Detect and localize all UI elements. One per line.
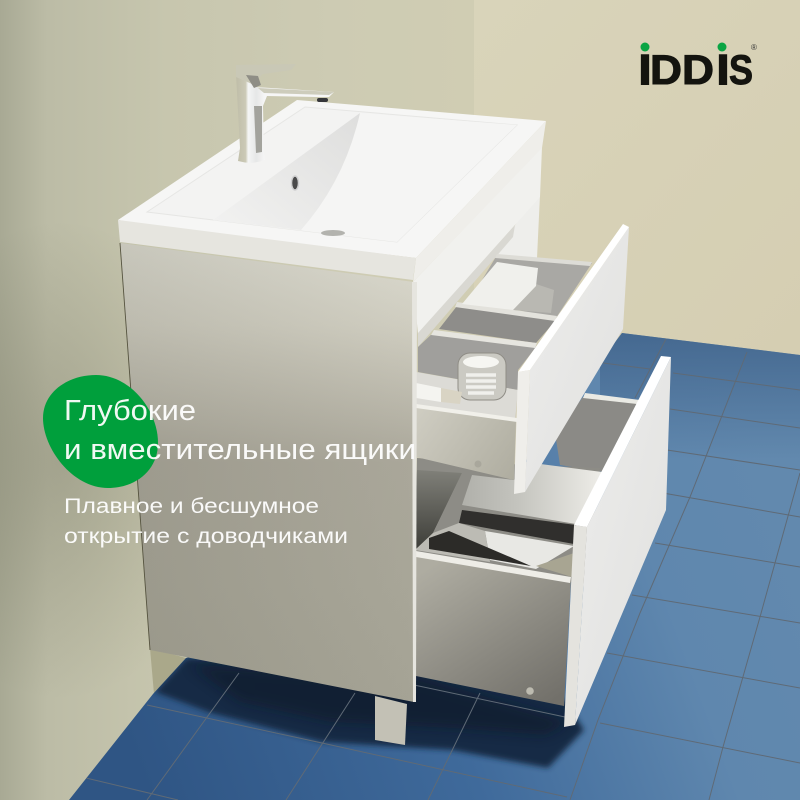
tray floor: [416, 372, 518, 421]
lower drawer interior: [415, 458, 602, 585]
upper drawer front panel: [514, 224, 629, 494]
jar of cotton pads: [458, 353, 506, 400]
lower drawer back wall: [555, 393, 640, 472]
heading: и вместительные ящики: [64, 434, 416, 466]
cabinet front vertical edge: [412, 282, 417, 702]
subheading: открытие с доводчиками: [64, 524, 348, 548]
logo: IDDIS: D: [650, 46, 682, 93]
logo: IDDIS: [639, 42, 757, 93]
heading: Глубокие: [64, 395, 196, 427]
subheading: Плавное и бесшумное: [64, 494, 319, 518]
lower drawer front panel: [564, 356, 671, 727]
logo: IDDIS: S: [729, 46, 753, 93]
upper drawer interior: [416, 254, 592, 421]
white tray: [485, 531, 574, 569]
logo: IDDIS: D: [682, 46, 714, 93]
upper drawer side box: [416, 404, 517, 480]
cabinet opening and front rail: [413, 147, 542, 347]
vanity cabinet side panel: [120, 243, 414, 702]
logo: IDDIS: I: [717, 46, 729, 93]
green blob accent: [43, 375, 158, 488]
cabinet shadow on floor: [155, 658, 584, 768]
faucet: [236, 64, 334, 163]
small organiser box: [416, 383, 441, 402]
dark case under towel: [459, 510, 576, 544]
folded towels: [513, 284, 554, 313]
washbasin: [118, 100, 546, 282]
scene: blue tiled floor: [60, 320, 800, 800]
hair dryer: [429, 531, 531, 566]
heading: [64, 395, 416, 466]
logo: IDDIS: I: [639, 46, 651, 93]
logo: IDDIS: ®: [751, 43, 757, 52]
subheading: [64, 494, 348, 548]
lower drawer side box: [416, 551, 571, 706]
cabinet leg: [375, 696, 407, 745]
towel: [462, 462, 602, 524]
